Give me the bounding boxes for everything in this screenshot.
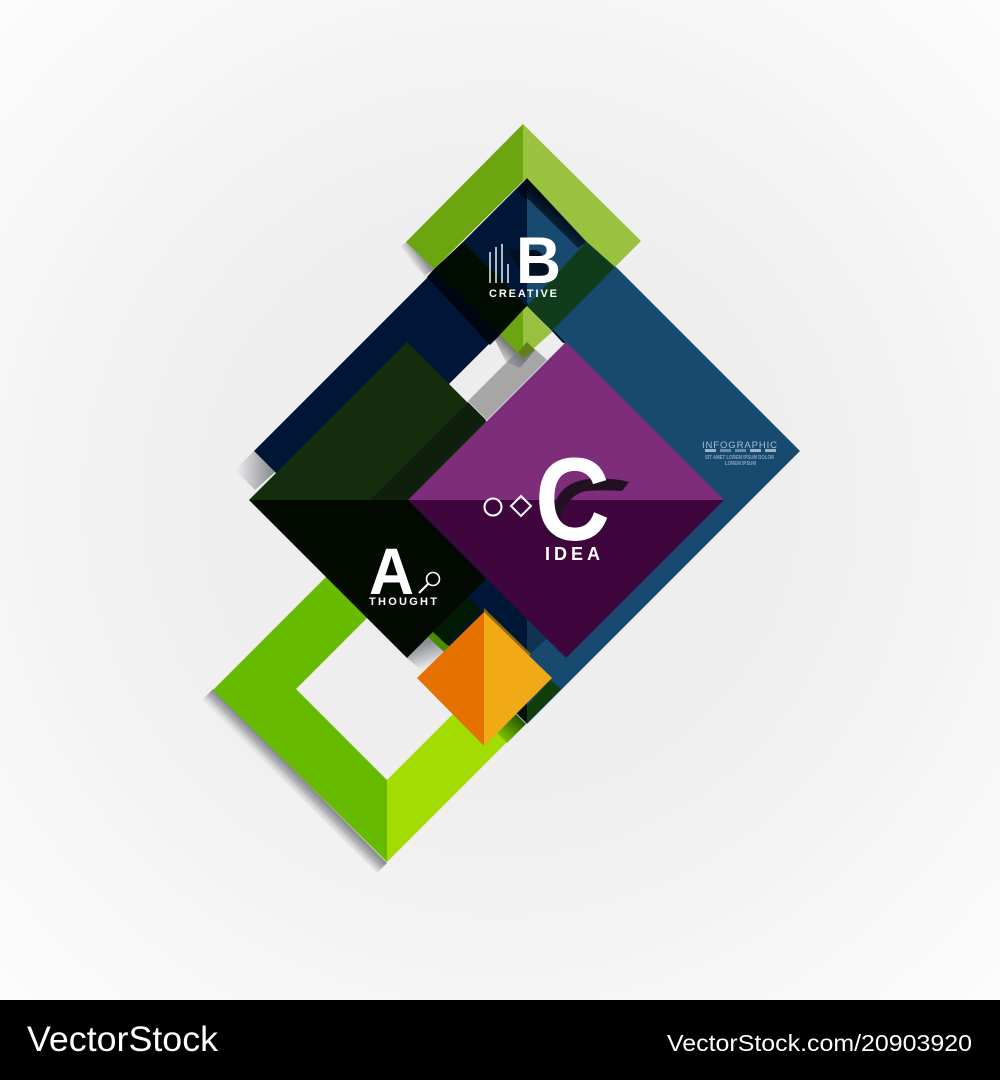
upper half [408,342,724,500]
darker strip [370,402,486,500]
orange diamond [417,608,552,746]
letter B: B [516,223,561,297]
frame left side [213,516,387,862]
thin edge line [527,303,565,343]
overlap on blue [527,242,615,331]
diamond C: idea [408,342,724,658]
letter A: A [369,534,414,608]
frame right side [387,697,507,862]
upper left side [406,124,523,269]
dark overlap bits near orange [433,598,561,723]
caption title: INFOGRAPHIC [702,440,777,451]
icon: circle [484,498,502,516]
shadow beside small green tip [492,334,535,368]
word IDEA: IDEA [545,544,600,564]
letter C: C [535,434,610,566]
lower dark green [527,680,561,723]
shadow: top green diamond corner [398,242,434,276]
inner shadow left [517,178,527,201]
label C: idea [484,434,629,566]
shadow under letter C [544,531,575,541]
frame blue half [527,178,800,724]
dark shadow strip on navy [427,269,500,345]
upper half [249,342,565,500]
dark blue patch [527,618,547,657]
label A: thought [369,534,440,608]
icon: diamond [511,496,531,516]
footer image id: VectorStock.com/20903920 [667,1030,972,1056]
upper right side [523,124,641,267]
shadow: below thought diamond [407,637,450,678]
word THOUGHT: THOUGHT [369,596,437,608]
frame end fading under blue [497,714,526,743]
caption line one: SIT AMET LOREM IPSUM DOLOR [705,455,774,461]
inner shadow right [527,178,586,248]
word CREATIVE: CREATIVE [489,288,557,300]
bottom tip left [500,310,523,358]
shadow strip [484,608,531,658]
shadow: lower-left of green frame [202,689,387,873]
green diamond frame, top [406,124,641,358]
infographic caption [702,440,777,467]
icon: vertical bars [490,244,508,283]
bottom tip overlap [518,342,535,358]
footer brand: VectorStock [27,1020,219,1059]
caption bars [705,449,776,452]
blue square frame [254,178,800,724]
lower half [249,500,565,658]
right half [484,612,552,746]
grey shadow band in the opening [468,342,547,420]
footer bar [0,1000,1000,1080]
label B: creative [489,223,561,300]
shadow: navy frame corner [235,451,275,490]
diamond A: thought [249,342,565,658]
frame navy half [254,178,527,724]
icon: magnifier [419,572,440,593]
bottom tip right [523,306,552,358]
lower black corner [518,706,527,723]
letter C swash shadow [553,479,629,519]
frame small piece near thought diamond [428,631,450,652]
dark green band [433,598,482,645]
left half [417,612,484,746]
caption line two: LOREM IPSUM [725,461,756,467]
green square frame [213,516,526,862]
letter B shadow [508,250,548,275]
overlap on navy [434,242,527,335]
lower half [408,500,724,658]
